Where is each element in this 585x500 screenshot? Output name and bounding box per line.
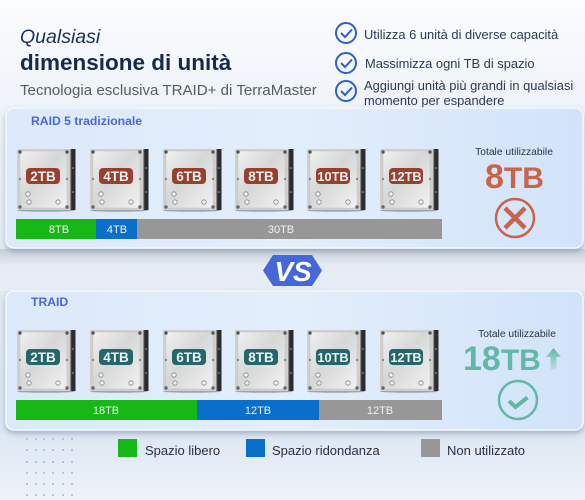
capacity bar: TRAID: 12TB (367, 405, 393, 417)
drive 4TB: 4TB (103, 169, 129, 184)
total value: 8TB: 8TB (485, 158, 544, 196)
feature list (336, 23, 573, 108)
drive 12TB: 12TB (390, 169, 422, 184)
capacity bar: TRAID (16, 400, 442, 420)
total label: RAID 5: Totale utilizzabile (475, 147, 553, 158)
drive 12TB: 12TB (390, 350, 422, 365)
drive 2TB (17, 330, 76, 393)
drive 12TB (380, 330, 438, 393)
drive 6TB: 6TB (176, 350, 202, 365)
icon: cross (496, 199, 534, 237)
drive 2TB: 2TB (30, 350, 56, 365)
legend (118, 439, 525, 458)
heading: dimensione di unità (20, 50, 232, 75)
drive 8TB: 8TB (248, 350, 274, 365)
drive 10TB: 10TB (317, 169, 349, 184)
capacity bar: RAID 5 (16, 219, 442, 239)
drive 2TB (17, 149, 76, 212)
feature text 1: Utilizza 6 unità di diverse capacità (364, 27, 559, 42)
panel: TRAID (6, 291, 583, 430)
drive 4TB (90, 149, 148, 212)
drive 10TB: 10TB (317, 350, 349, 365)
vs band background (0, 249, 585, 291)
icon: check 1 (336, 23, 356, 43)
drive 8TB (235, 149, 294, 212)
capacity bar: RAID 5: 8TB (49, 224, 69, 236)
drive 10TB (307, 149, 366, 212)
drive 10TB (307, 330, 366, 393)
drive 6TB (163, 330, 222, 393)
drive 4TB (90, 330, 148, 393)
panel heading: RAID 5: RAID 5 tradizionale (31, 114, 142, 128)
legend: redundancy: Spazio ridondanza (272, 443, 380, 458)
capacity bar: TRAID: 12TB (245, 405, 271, 417)
legend: unused: Non utilizzato (447, 443, 525, 458)
capacity bar: RAID 5: 4TB (107, 224, 127, 236)
legend: redundancy (246, 439, 380, 458)
icon: check (499, 381, 537, 419)
legend: unused (421, 439, 525, 458)
icon: check 3 (336, 81, 356, 101)
drive 12TB (380, 149, 438, 212)
feature text 2: Massimizza ogni TB di spazio (365, 56, 535, 71)
capacity bar: RAID 5: 30TB (268, 224, 294, 236)
drive 6TB (163, 149, 222, 212)
drive 2TB: 2TB (30, 169, 56, 184)
panel heading: TRAID: TRAID (31, 295, 68, 309)
icon: check 2 (336, 53, 356, 73)
legend: free space (118, 439, 220, 458)
heading (20, 26, 317, 99)
heading: Qualsiasi (20, 26, 101, 48)
feature text 3 (364, 78, 573, 108)
feature text 3: momento per espandere (364, 93, 504, 108)
VS badge (263, 255, 322, 287)
drive 8TB (235, 330, 294, 393)
drive 4TB: 4TB (103, 350, 129, 365)
panel: RAID 5 (6, 108, 583, 248)
VS badge: VS (274, 256, 312, 287)
total value: 18TB: 18TB (463, 340, 541, 378)
drive 6TB: 6TB (176, 169, 202, 184)
heading: Tecnologia esclusiva TRAID+ di TerraMaster (20, 82, 317, 99)
total label: TRAID: Totale utilizzabile (478, 329, 556, 340)
drive 8TB: 8TB (248, 169, 274, 184)
legend: free space: Spazio libero (145, 443, 220, 458)
capacity bar: TRAID: 18TB (93, 405, 119, 417)
dot pattern (26, 438, 73, 496)
icon: up arrow (546, 348, 561, 370)
feature text 3: Aggiungi unità più grandi in qualsiasi (364, 78, 573, 93)
